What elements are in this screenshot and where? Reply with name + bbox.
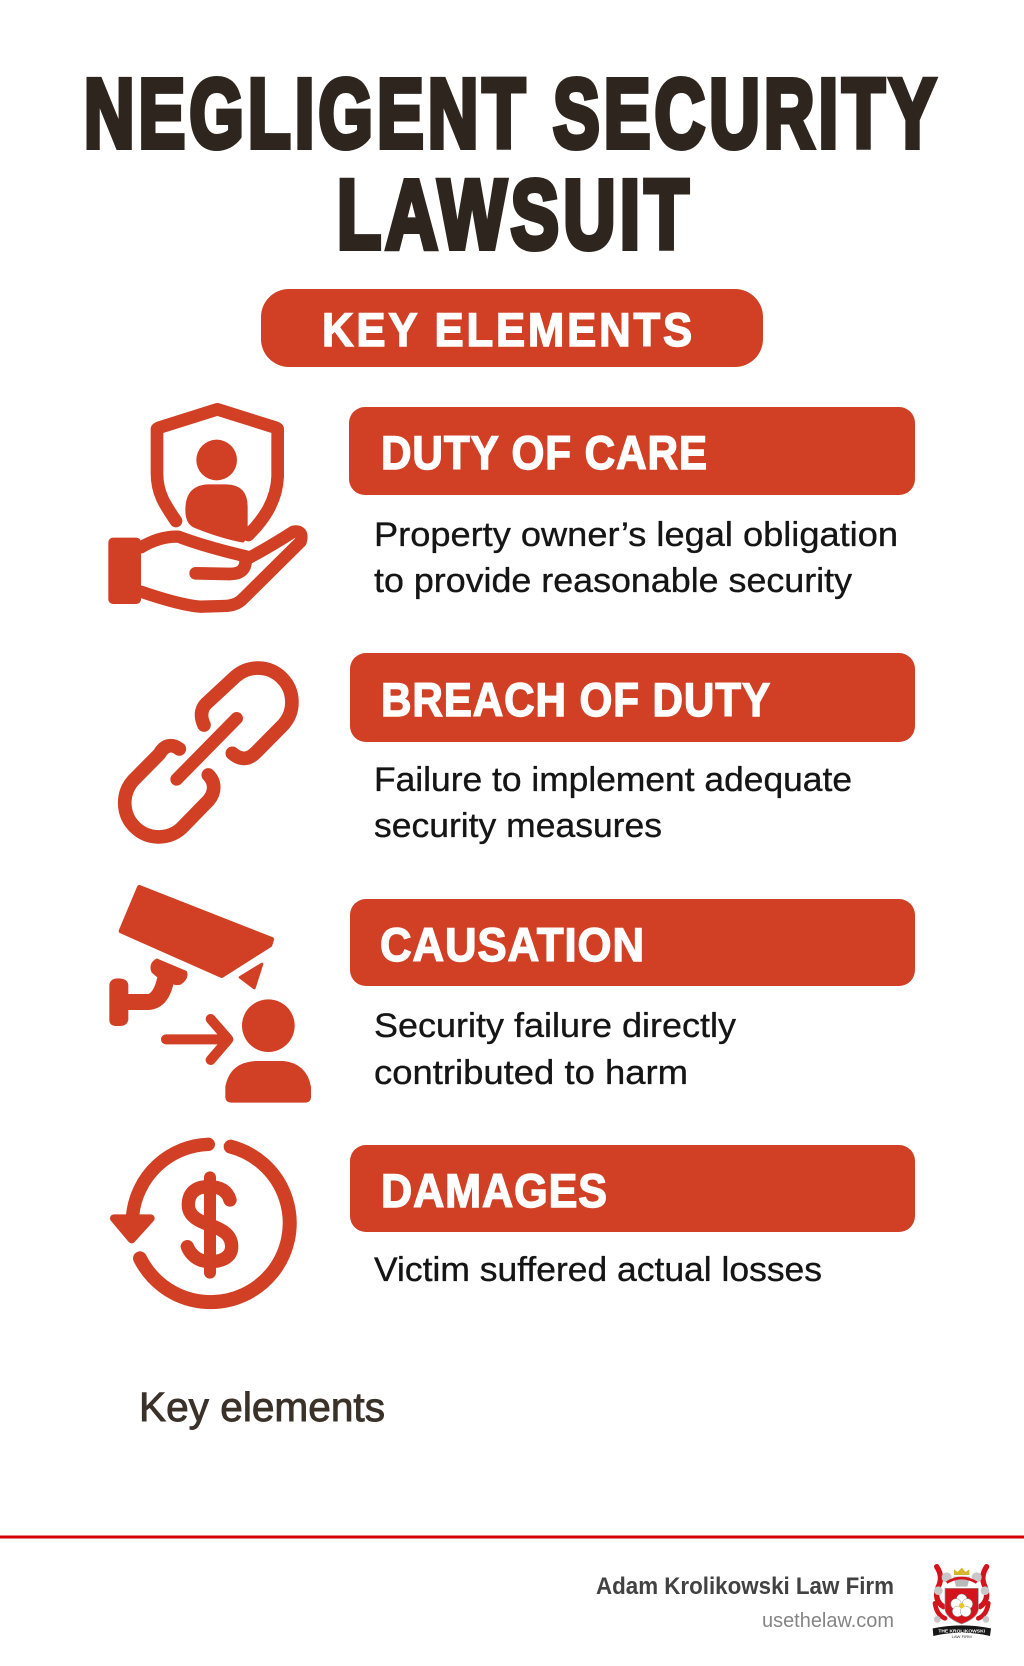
banner: key elements [261,289,763,367]
logo: firm coat of arms: THE KROLIKOWSKI [938,1629,985,1634]
banner: key elements: KEY ELEMENTS [322,303,695,356]
caption: key elements: Key elements [139,1384,385,1430]
footer: firm name and website: Adam Krolikowski Law Firm [596,1573,894,1600]
heading: causation [350,899,915,986]
panel: breach of duty [350,653,915,845]
logo: firm coat of arms [933,1567,991,1639]
text: breach of duty description [374,761,852,845]
panel: damages [350,1145,915,1289]
text: duty of care description: Property owner’s legal obligation [374,516,898,554]
title: LAWSUIT [337,160,693,269]
panel: causation [350,899,915,1092]
text: duty of care description [374,516,898,600]
text: damages description: Victim suffered actual losses [374,1251,822,1289]
heading: breach of duty: BREACH OF DUTY [381,673,771,726]
icon: dollar sign in circular arrow [114,1144,290,1302]
heading: duty of care: DUTY OF CARE [381,426,708,479]
footer: firm name and website: usethelaw.com [762,1610,894,1632]
text: duty of care description: to provide reasonable security [374,562,852,600]
text: breach of duty description: Failure to implement adequate [374,761,852,799]
text: causation description: contributed to harm [374,1054,688,1092]
panel: duty of care [349,407,915,600]
heading: duty of care [349,407,915,495]
text: breach of duty description: security measures [374,807,662,845]
heading: breach of duty [350,653,915,742]
text: causation description: Security failure directly [374,1007,736,1045]
icon: broken chain link [125,668,292,837]
heading: causation: CAUSATION [380,918,645,971]
heading: damages: DAMAGES [381,1164,608,1217]
text: causation description [374,1007,736,1092]
title [84,59,940,269]
icon: security camera pointing at person [109,887,311,1103]
logo: firm coat of arms: LAW FIRM [952,1635,972,1639]
footer: firm name and website [596,1573,894,1632]
icon: shield with person on open hand [108,409,301,607]
heading: damages [350,1145,915,1232]
